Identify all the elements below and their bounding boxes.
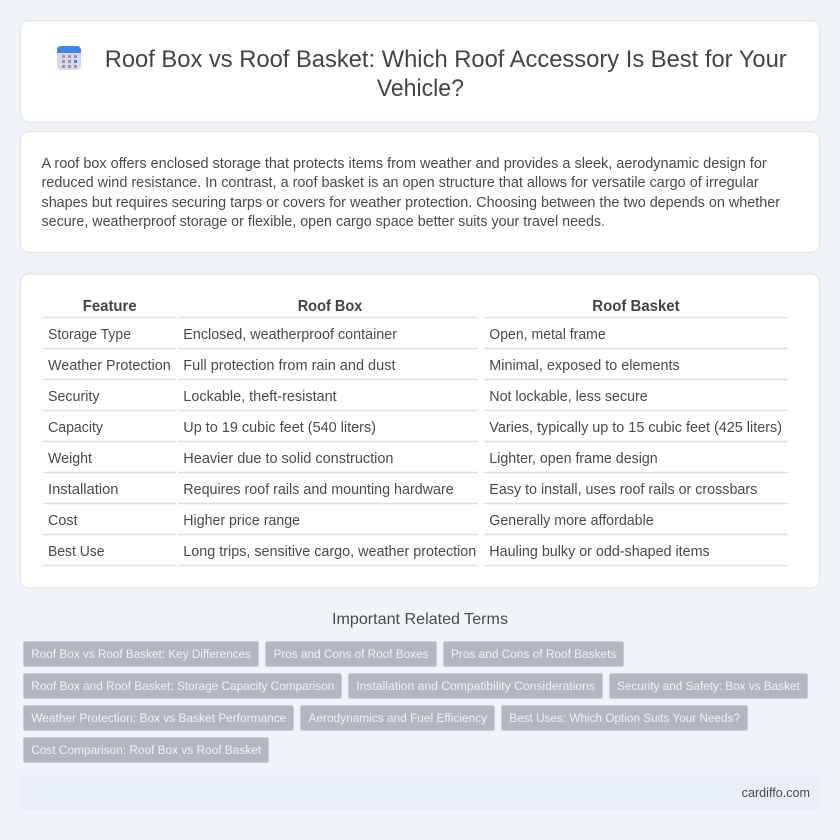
chip bbox=[348, 674, 602, 698]
row: storage type bbox=[48, 327, 606, 343]
heading: related terms: Important Related Terms bbox=[332, 611, 508, 628]
table header: Feature bbox=[83, 298, 137, 315]
chip bbox=[610, 674, 808, 698]
chip bbox=[444, 642, 624, 666]
row: security: Lockable, theft-resistant bbox=[183, 389, 337, 405]
row: security: Not lockable, less secure bbox=[489, 389, 648, 405]
row: installation: Requires roof rails and mounting hardware bbox=[183, 482, 454, 498]
row: capacity: Varies, typically up to 15 cubic feet (425 liters) bbox=[489, 420, 782, 436]
row: installation: Easy to install, uses roof rails or crossbars bbox=[489, 482, 757, 498]
footer bbox=[20, 776, 820, 810]
row: storage type: Storage Type bbox=[48, 327, 131, 343]
row: cost: Generally more affordable bbox=[489, 513, 654, 529]
chip: Best Uses: Which Option Suits Your Needs? bbox=[509, 711, 740, 725]
row: installation bbox=[48, 482, 757, 498]
chip: Roof Box vs Roof Basket: Key Differences bbox=[31, 647, 251, 661]
row: security: Security bbox=[48, 389, 100, 405]
row: installation: Installation bbox=[48, 482, 118, 498]
text block: intro: A roof box offers enclosed storage that protects items from weather and provides a sleek, aerodynamic design for bbox=[42, 156, 767, 172]
title bbox=[105, 46, 787, 102]
row: best use: Long trips, sensitive cargo, weather protection bbox=[183, 544, 476, 560]
icon: calendar bbox=[57, 46, 81, 70]
row: best use bbox=[48, 544, 710, 560]
row: weight: Heavier due to solid construction bbox=[183, 451, 394, 467]
chip: Roof Box and Roof Basket: Storage Capacity Comparison bbox=[31, 679, 334, 693]
panel: title card bbox=[20, 21, 820, 122]
chip bbox=[24, 674, 342, 698]
row: capacity: Capacity bbox=[48, 420, 104, 436]
row: storage type: Enclosed, weatherproof container bbox=[183, 327, 397, 343]
text block: intro: secure, weatherproof storage or flexible, open cargo space better suits your travel needs. bbox=[42, 214, 605, 230]
chip: Weather Protection: Box vs Basket Performance bbox=[31, 711, 286, 725]
row: weather protection: Full protection from rain and dust bbox=[183, 358, 396, 374]
chip: Aerodynamics and Fuel Efficiency bbox=[308, 711, 488, 725]
row: cost bbox=[48, 513, 654, 529]
chip bbox=[24, 706, 294, 730]
related term chips bbox=[24, 642, 808, 762]
row: weight bbox=[48, 451, 658, 467]
panel: intro paragraph bbox=[20, 132, 820, 252]
table header: Roof Box bbox=[298, 298, 362, 315]
chip: Security and Safety: Box vs Basket bbox=[617, 679, 800, 693]
row: cost: Cost bbox=[48, 513, 78, 529]
row: cost: Higher price range bbox=[183, 513, 300, 529]
chip: Cost Comparison: Roof Box vs Roof Basket bbox=[31, 743, 262, 757]
table header: Roof Basket bbox=[592, 298, 680, 315]
row: best use: Best Use bbox=[48, 544, 104, 560]
row: weather protection bbox=[48, 358, 680, 374]
row: capacity: Up to 19 cubic feet (540 liters) bbox=[183, 420, 376, 436]
chip: Installation and Compatibility Considerations bbox=[356, 679, 595, 693]
row: weather protection: Weather Protection bbox=[48, 358, 171, 374]
row: weather protection: Minimal, exposed to elements bbox=[489, 358, 680, 374]
chip bbox=[266, 642, 436, 666]
text block: intro bbox=[42, 156, 780, 230]
row: best use: Hauling bulky or odd-shaped items bbox=[489, 544, 710, 560]
panel: comparison table bbox=[20, 274, 820, 588]
title: Vehicle? bbox=[377, 75, 464, 102]
row: weight: Weight bbox=[48, 451, 92, 467]
chip bbox=[300, 706, 494, 730]
text block: intro: shapes but requires securing tarps or covers for weather protection. Choosing between the two depends on whether bbox=[42, 195, 780, 211]
row: weight: Lighter, open frame design bbox=[489, 451, 658, 467]
text block: intro: reduced wind resistance. In contrast, a roof basket is an open structure that allows for versatile cargo of irregular bbox=[42, 175, 759, 191]
chip bbox=[24, 642, 258, 666]
title: Roof Box vs Roof Basket: Which Roof Accessory Is Best for Your bbox=[105, 46, 787, 73]
table header bbox=[83, 298, 680, 315]
row: storage type: Open, metal frame bbox=[489, 327, 606, 343]
chip bbox=[502, 706, 748, 730]
footer: cardiffo.com bbox=[742, 786, 810, 800]
chip bbox=[24, 738, 268, 762]
chip: Pros and Cons of Roof Baskets bbox=[451, 647, 616, 661]
row: capacity bbox=[48, 420, 782, 436]
row: security bbox=[48, 389, 648, 405]
chip: Pros and Cons of Roof Boxes bbox=[274, 647, 428, 661]
